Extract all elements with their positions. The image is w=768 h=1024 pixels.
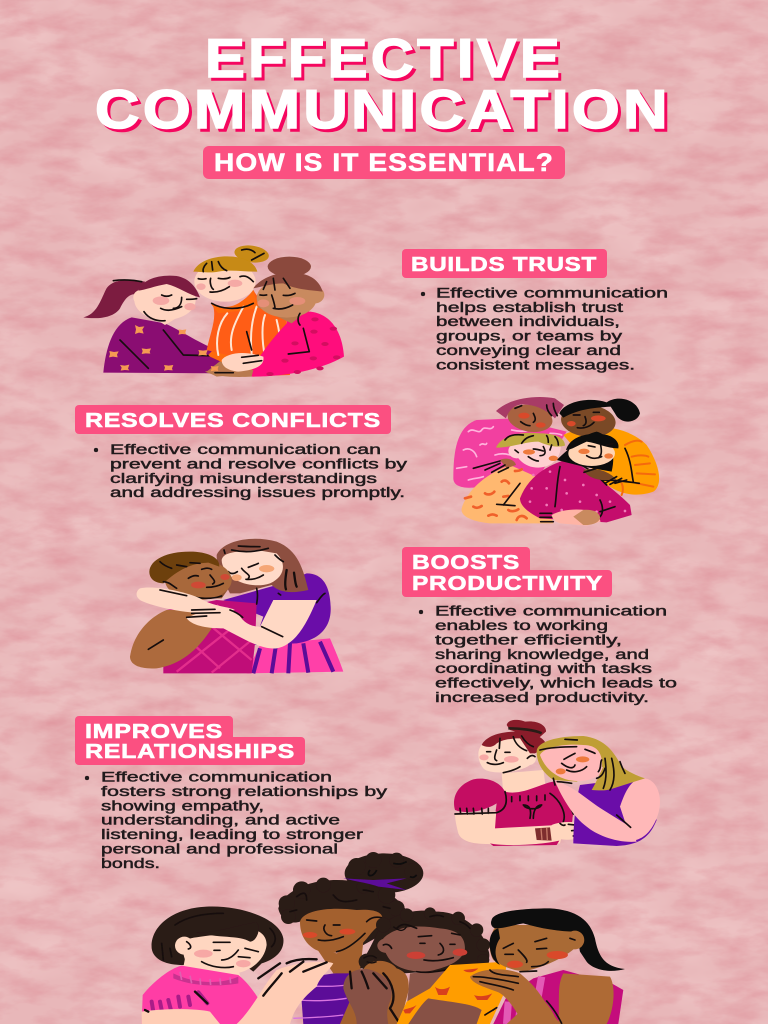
text: builds trust: groups, or teams by — [436, 328, 622, 344]
illustration: two friends side by side — [454, 720, 660, 846]
text: improves relationships: listening, leading to stronger — [101, 827, 364, 842]
text: boosts productivity: effectively, which leads to — [435, 676, 677, 690]
title — [95, 27, 674, 143]
text: resolves conflicts — [94, 442, 407, 500]
text: resolves conflicts: Effective communication can — [110, 442, 381, 457]
text: boosts productivity: enables to working — [435, 618, 608, 633]
title: EFFECTIVE — [208, 30, 566, 92]
illustration: two friends hugging — [130, 539, 343, 673]
text: improves relationships: understanding, and active — [101, 812, 340, 828]
badge: builds trust — [402, 249, 607, 278]
text: resolves conflicts: clarifying misunderstandings — [110, 471, 377, 486]
text: builds trust: helps establish trust — [436, 300, 623, 315]
text: resolves conflicts: prevent and resolve conflicts by — [110, 456, 407, 472]
text: improves relationships — [85, 770, 387, 871]
illustration: three friends hugging — [83, 243, 344, 377]
text: improves relationships: fosters strong relationships by — [101, 784, 387, 799]
text: builds trust: conveying clear and — [436, 343, 621, 358]
badge: resolves conflicts — [75, 405, 391, 434]
text: improves relationships: showing empathy, — [101, 798, 264, 814]
badge: improves relationships — [75, 716, 305, 765]
text: builds trust: Effective communication — [436, 286, 668, 300]
illustration: four friends embracing — [453, 397, 659, 526]
badge: improves relationships: IMPROVES — [85, 720, 223, 743]
text: resolves conflicts: and addressing issues promptly. — [110, 485, 405, 500]
text: builds trust: between individuals, — [436, 314, 620, 329]
text: builds trust — [421, 286, 668, 372]
badge: resolves conflicts: RESOLVES CONFLICTS — [85, 409, 381, 432]
text: improves relationships: bonds. — [101, 856, 160, 871]
title: COMMUNICATION — [98, 81, 674, 143]
text: boosts productivity — [419, 604, 677, 705]
text: boosts productivity: sharing knowledge, and — [435, 647, 649, 662]
text: boosts productivity: coordinating with tasks — [435, 661, 652, 676]
text: improves relationships: personal and professional — [101, 842, 338, 856]
badge: boosts productivity: PRODUCTIVITY — [412, 572, 603, 595]
text: improves relationships: Effective communication — [101, 770, 332, 784]
badge: boosts productivity — [402, 547, 612, 597]
text: boosts productivity: increased productivity. — [435, 690, 649, 705]
text: boosts productivity: Effective communication — [435, 604, 667, 618]
subtitle badge: HOW IS IT ESSENTIAL? — [214, 149, 554, 177]
text: boosts productivity: together efficiently, — [435, 632, 622, 648]
badge: builds trust: BUILDS TRUST — [411, 253, 597, 276]
title: EFFECTIVE — [205, 27, 563, 89]
badge: boosts productivity: BOOSTS — [412, 551, 520, 574]
title: COMMUNICATION — [95, 78, 671, 140]
text: builds trust: consistent messages. — [436, 358, 635, 372]
badge: improves relationships: RELATIONSHIPS — [85, 740, 295, 763]
illustration: four friends group — [142, 852, 625, 1024]
